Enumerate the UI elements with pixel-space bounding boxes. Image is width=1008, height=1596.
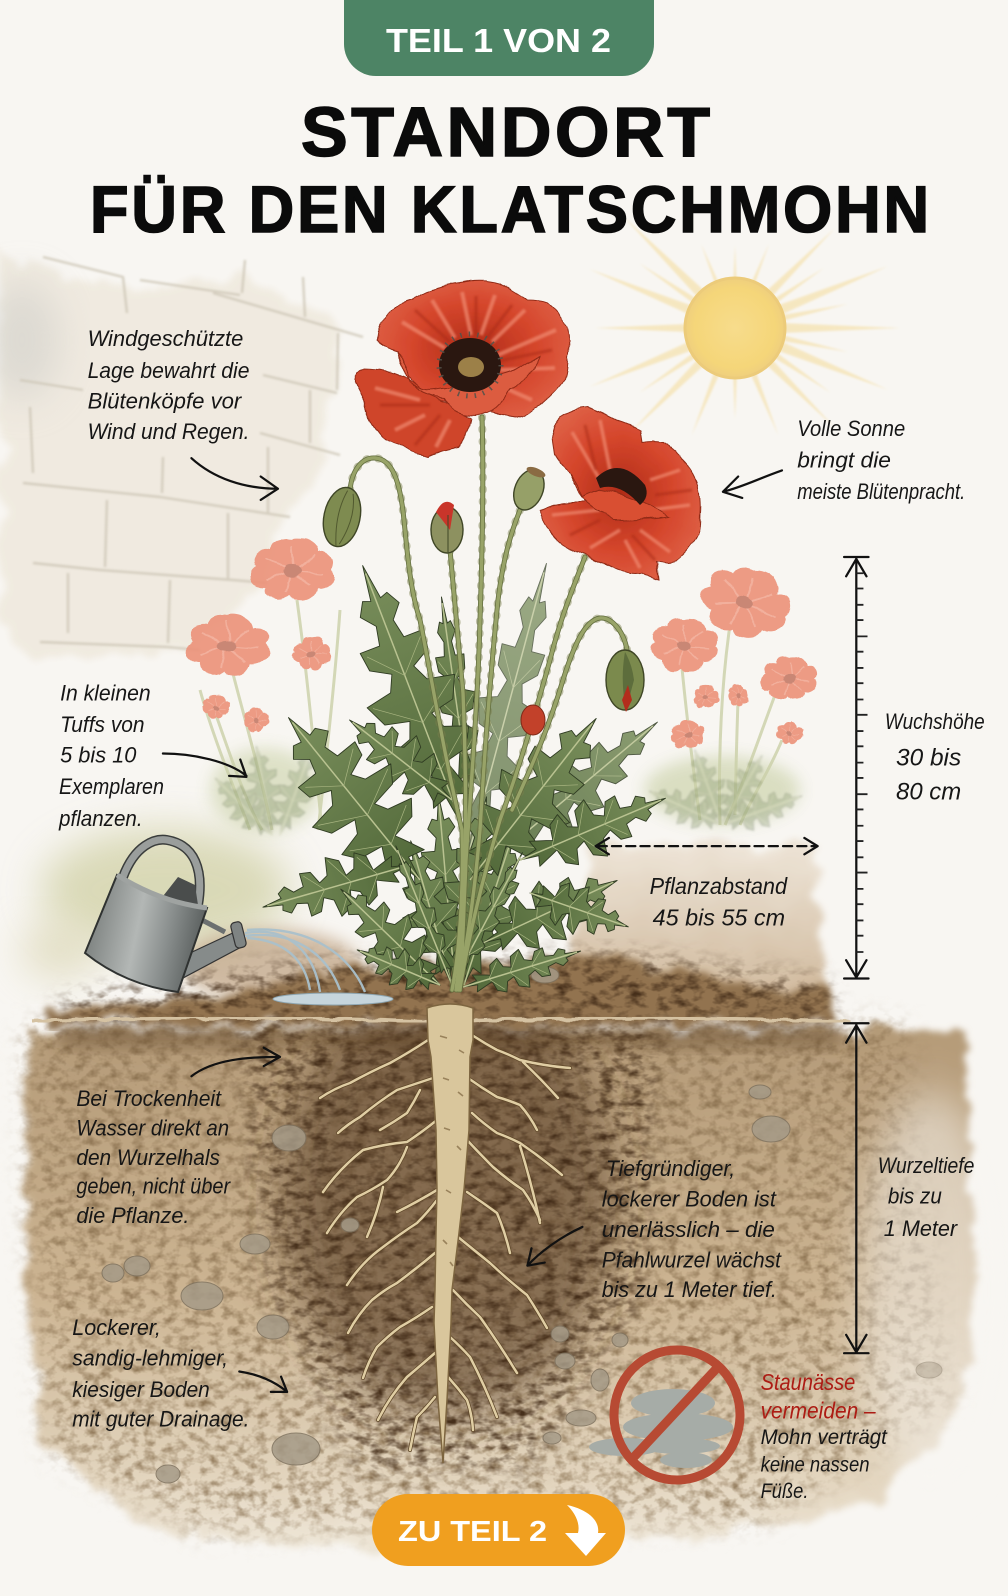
note: tufts: pflanzen. [58, 806, 143, 831]
arrow: tufts [163, 753, 246, 777]
arrow: plant spacing [596, 838, 818, 854]
poppy flower small [540, 407, 700, 580]
topsoil strip [30, 955, 850, 1024]
ground above soil [20, 828, 825, 1001]
arrow: wind [191, 458, 278, 500]
puddle [589, 1389, 733, 1468]
stems [350, 417, 627, 990]
note: waterlogging: keine nassen [761, 1452, 870, 1476]
note: plant spacing: 45 bis 55 cm [653, 905, 785, 931]
water stream [245, 929, 365, 992]
next part button: ZU TEIL 2 [398, 1516, 547, 1548]
note: deep soil: unerlässlich – die [602, 1217, 775, 1242]
note: waterlogging: Füße. [761, 1479, 808, 1503]
sun [587, 212, 900, 437]
spout [183, 931, 245, 978]
note: drought watering [76, 1086, 231, 1228]
note: wind: Windgeschützte [88, 326, 243, 351]
note: growth height: 80 cm [896, 778, 961, 805]
note: sun: bringt die [797, 447, 891, 472]
note: tufts: 5 bis 10 [60, 743, 137, 768]
note: waterlogging: Mohn verträgt [761, 1425, 888, 1449]
note: plant spacing [650, 873, 788, 931]
note: growth height: Wuchshöhe [885, 709, 985, 734]
note: tufts: Tuffs von [60, 712, 145, 737]
note: deep soil [602, 1156, 782, 1302]
body [85, 875, 207, 992]
note: sun: Volle Sonne [797, 416, 905, 441]
note: root depth: 1 Meter [884, 1216, 959, 1241]
note: loose soil [72, 1315, 249, 1431]
soil cross-section [25, 985, 1000, 1555]
note: wind: Blütenköpfe vor [88, 388, 243, 413]
note: tufts: Exemplaren [59, 774, 164, 799]
note: root depth [878, 1153, 974, 1241]
note: wind [88, 326, 249, 444]
note: loose soil: Lockerer, [72, 1315, 161, 1340]
flower centre [596, 468, 647, 505]
note: wind: Wind und Regen. [88, 419, 249, 444]
note: wind: Lage bewahrt die [88, 358, 249, 383]
note: loose soil: mit guter Drainage. [72, 1406, 249, 1431]
central leaf mass [383, 793, 541, 994]
bud hook left [318, 484, 366, 550]
note: deep soil: Tiefgründiger, [606, 1156, 735, 1181]
poppy flower large [355, 280, 569, 457]
background poppies right [642, 554, 818, 842]
note: loose soil: kiesiger Boden [72, 1377, 210, 1402]
title: FÜR DEN KLATSCHMOHN [90, 172, 932, 246]
title: STANDORT [301, 93, 710, 171]
arrow: deep soil [527, 1227, 582, 1266]
title [90, 93, 932, 246]
note: root depth: bis zu [888, 1184, 942, 1209]
plant foliage [249, 549, 677, 1006]
note: drought watering: Bei Trockenheit [76, 1086, 222, 1111]
roots [320, 1004, 570, 1463]
note: waterlogging: Staunässe [761, 1369, 855, 1395]
note: growth height [885, 709, 985, 805]
note: drought watering: den Wurzelhals [76, 1145, 220, 1170]
watering can [85, 840, 393, 1005]
bud middle [431, 502, 463, 553]
note: drought watering: Wasser direkt an [76, 1115, 229, 1140]
small red bud [521, 705, 545, 735]
title badge: TEIL 1 VON 2 [386, 22, 611, 59]
arrow: sun [723, 470, 782, 498]
note: tufts [58, 681, 164, 831]
bud hook right [606, 650, 644, 712]
handle [123, 840, 200, 905]
background poppies left [186, 539, 340, 848]
note: drought watering: geben, nicht über [76, 1173, 231, 1198]
note: growth height: 30 bis [896, 745, 961, 772]
taproot [427, 1004, 473, 1463]
note: loose soil: sandig-lehmiger, [72, 1345, 228, 1370]
note: sun [797, 416, 965, 504]
stones in soil [102, 967, 942, 1483]
bud seed head [508, 463, 550, 514]
note: waterlogging [761, 1369, 888, 1503]
next part button [372, 1494, 625, 1566]
note: root depth: Wurzeltiefe [878, 1153, 974, 1178]
title badge [344, 0, 654, 76]
brick wall [0, 250, 363, 660]
note: sun: meiste Blütenpracht. [797, 479, 965, 504]
note: drought watering: die Pflanze. [76, 1203, 189, 1228]
note: waterlogging: vermeiden – [761, 1397, 877, 1423]
arrow: drought watering [191, 1048, 280, 1076]
height ruler [844, 557, 869, 978]
buds [318, 463, 644, 735]
note: deep soil: lockerer Boden ist [602, 1187, 777, 1212]
note: deep soil: bis zu 1 Meter tief. [602, 1277, 777, 1302]
root depth ruler [844, 1023, 869, 1353]
taproot bark marks [440, 1036, 464, 1266]
note: tufts: In kleinen [60, 681, 151, 706]
note: plant spacing: Pflanzabstand [650, 873, 788, 899]
flower centre [439, 334, 501, 396]
note: deep soil: Pfahlwurzel wächst [602, 1248, 782, 1273]
arrow: loose soil [239, 1372, 287, 1392]
no waterlogging sign [589, 1350, 740, 1480]
icon: curved arrow down [565, 1505, 606, 1556]
